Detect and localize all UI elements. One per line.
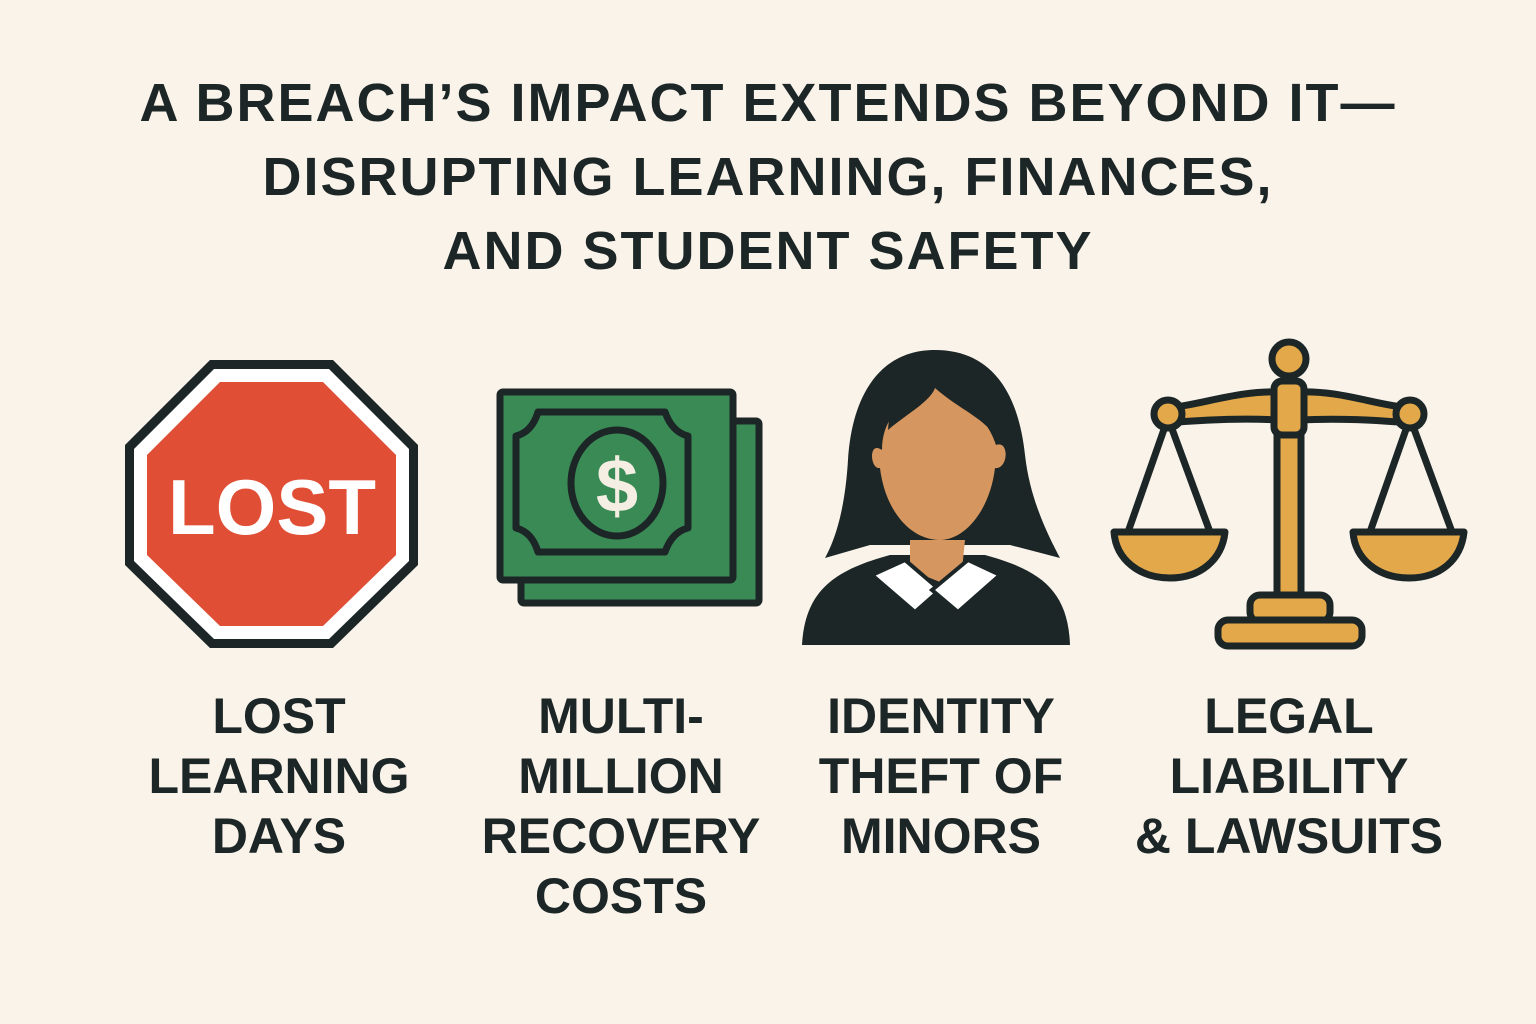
title: AND STUDENT SAFETY bbox=[442, 221, 1094, 281]
label: identity theft: THEFT OF bbox=[819, 748, 1063, 804]
icon: stop sign bbox=[125, 360, 418, 648]
icon: stop sign: LOST bbox=[168, 463, 376, 551]
label: recovery costs: RECOVERY bbox=[482, 808, 760, 864]
label: recovery costs: MILLION bbox=[518, 748, 724, 804]
label: legal liability: LEGAL bbox=[1204, 688, 1374, 744]
label: lost learning days bbox=[148, 688, 410, 864]
icon: student person bbox=[802, 350, 1070, 645]
label: recovery costs: MULTI- bbox=[538, 688, 704, 744]
label: recovery costs: COSTS bbox=[535, 868, 707, 924]
title: A BREACH’S IMPACT EXTENDS BEYOND IT— bbox=[139, 73, 1397, 133]
label: legal liability: LIABILITY bbox=[1170, 748, 1408, 804]
label: identity theft: MINORS bbox=[841, 808, 1041, 864]
title bbox=[139, 73, 1397, 281]
label: identity theft bbox=[819, 688, 1063, 864]
label: legal liability: & LAWSUITS bbox=[1135, 808, 1443, 864]
label: recovery costs bbox=[482, 688, 760, 924]
label: lost learning days: DAYS bbox=[212, 808, 346, 864]
label: lost learning days: LEARNING bbox=[148, 748, 410, 804]
title: DISRUPTING LEARNING, FINANCES, bbox=[262, 147, 1274, 207]
label: lost learning days: LOST bbox=[212, 688, 346, 744]
label: identity theft: IDENTITY bbox=[827, 688, 1055, 744]
label: legal liability bbox=[1135, 688, 1443, 864]
icon: money bills: $ bbox=[596, 444, 638, 529]
icon: scales of justice bbox=[1114, 342, 1464, 646]
icon: money bills bbox=[500, 392, 759, 603]
